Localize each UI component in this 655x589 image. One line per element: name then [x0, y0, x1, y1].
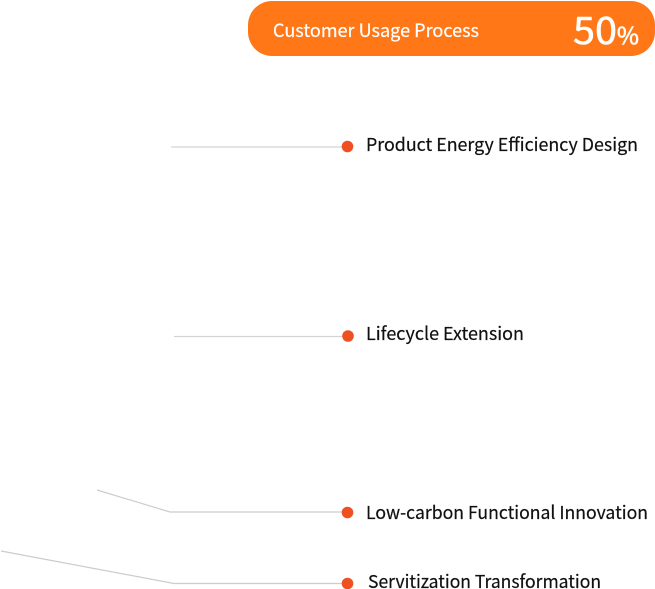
- callout: lifecycle extension: [174, 320, 524, 346]
- banner title: Customer Usage Process: [273, 17, 479, 43]
- callout: product energy efficiency design: [171, 131, 638, 157]
- callout: lifecycle extension: Lifecycle Extension: [366, 320, 524, 346]
- banner percentage: 50%: [573, 0, 639, 55]
- callout: product energy efficiency design: Product Energy Efficiency Design: [366, 131, 638, 157]
- callout: low-carbon functional innovation: Low-carbon Functional Innovation: [366, 499, 648, 525]
- callout: low-carbon functional innovation: [97, 490, 648, 525]
- header banner: [248, 0, 655, 56]
- callout: servitization transformation: [1, 551, 601, 589]
